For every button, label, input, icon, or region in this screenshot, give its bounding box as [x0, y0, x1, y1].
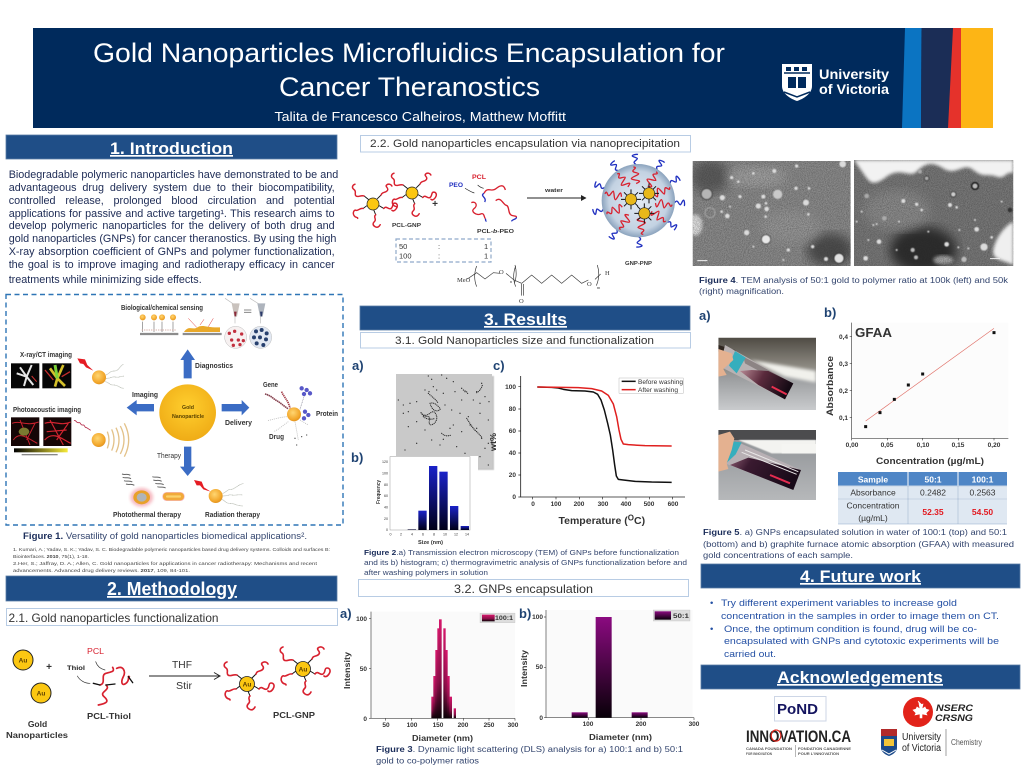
arrow: water: water [544, 188, 564, 194]
scheme: reactants [352, 173, 516, 235]
logo: University of Victoria Chemistry: of Victoria [902, 743, 941, 754]
histogram b: 10 [443, 532, 447, 536]
chemical structure: MeO [457, 277, 471, 284]
gold nanoparticles: Au [19, 658, 27, 664]
future work bullets: concentration in the samples in order to image them on CT. [721, 611, 999, 622]
scheme: gold nanoparticles to PCL-GNP [6, 647, 330, 740]
DLS chart b 50:1: 100 [532, 614, 543, 621]
figure 5 caption: (bottom) and b) graphite furnace atomic absorption (GFAA) with measured [703, 540, 1014, 549]
logo: University of Victoria Chemistry: University [902, 732, 941, 743]
DLS chart a 100:1: 100 [407, 722, 418, 729]
heading: 2. Methodology [6, 576, 337, 601]
DLS chart a 100:1: 50 [360, 666, 367, 673]
PCL-Thiol chains: PCL [87, 647, 105, 656]
gold nanoparticles: Gold [28, 719, 47, 729]
TEM image right [854, 160, 1013, 273]
DLS chart b 50:1: 300 [689, 721, 700, 728]
gold nanoparticles: Au [37, 690, 45, 698]
title banner [33, 28, 993, 128]
figure 3 caption: gold to co-polymer ratios [376, 756, 479, 766]
TGA chart c: C) [634, 515, 645, 527]
ratio box: 1 [484, 242, 488, 251]
arrow: delivery [222, 400, 249, 415]
GFAA labels: 0,10 [917, 442, 930, 449]
chemical structure: n [510, 279, 512, 284]
results table: 50:1 [924, 474, 942, 484]
logo: University of Victoria [782, 64, 889, 101]
DLS chart a 100:1: 100 [356, 616, 367, 623]
brand stripes [902, 28, 993, 128]
delivery illustration [265, 388, 310, 445]
panel: introduction [6, 135, 339, 291]
reaction arrow [149, 660, 220, 692]
subheading 2.2: 2.2. Gold nanoparticles encapsulation via nanoprecipitation [370, 138, 680, 150]
heading: Acknowledgements [701, 665, 1020, 689]
histogram b: 80 [384, 483, 388, 487]
TGA chart c: Before washing [638, 380, 683, 386]
logo: NSERC CRSNG [903, 697, 974, 727]
TGA chart c: 300 [598, 501, 609, 508]
histogram b: 4 [411, 532, 413, 536]
DLS chart b 50:1: b) [519, 606, 531, 621]
logo: NSERC CRSNG: NSERC [936, 703, 973, 714]
panel: figure 4 TEM images [688, 160, 1013, 296]
logo: PoND [774, 696, 826, 721]
figure 1 labels: Gold [182, 405, 194, 411]
results table: 0.2563 [970, 488, 996, 498]
logo: Innovation.ca: FOR INNOVATION [746, 752, 772, 756]
logo: University of Victoria: of Victoria [819, 81, 889, 97]
heading: Acknowledgements: Acknowledgements [777, 668, 943, 687]
arrow: diagnostics [180, 349, 195, 378]
DLS chart a 100:1: 100:1 [495, 615, 513, 622]
DLS chart b 50:1: 100 [583, 721, 594, 728]
references [13, 547, 330, 573]
scheme: reactants: PCL- b-PEO [477, 229, 515, 235]
DLS chart a 100:1: 200 [458, 722, 469, 729]
DLS chart a 100:1: Diameter (nm) [412, 733, 473, 743]
references: 1. Kumari, A.; Yadav, S. K.; Yadav, S. C. Biodegradable polymeric nanoparticles based drug delivery systems. Colloids and surfaces B: [13, 547, 330, 552]
DLS chart a 100:1: 250 [484, 722, 495, 729]
logo: Innovation.ca [746, 727, 852, 757]
figure 1 labels: Therapy [157, 453, 181, 460]
TGA chart c: 200 [574, 501, 585, 508]
PCL-GNP particles: Au [299, 666, 307, 674]
references: Biointerfaces. 2010 , 75(1), 1-18. [13, 554, 89, 559]
logo: University of Victoria: University [819, 66, 889, 82]
arrow: imaging [127, 400, 154, 415]
histogram b: 0 [386, 528, 388, 532]
results table: Absorbance [850, 488, 896, 498]
histogram b: 20 [384, 517, 388, 521]
PCL-Thiol chains: PCL-Thiol [87, 711, 131, 721]
arrow: water [527, 188, 586, 201]
figure 1 labels: Protein [316, 411, 338, 418]
references: 2.Her, S.; Jaffray, D. A.; Allen, C. Gold nanoparticles for applications in cancer radiotherapy: Mechanisms and recent [13, 561, 318, 566]
DLS chart b 50:1: 0 [539, 715, 543, 722]
TGA chart c: 100 [505, 384, 516, 391]
reaction arrow: THF [172, 660, 192, 671]
TGA chart c: After washing [638, 388, 678, 394]
figure 4 caption: (right) magnification. [699, 287, 784, 296]
chemical structure: H [605, 270, 610, 277]
GFAA labels: GFAA [855, 325, 893, 340]
GFAA labels: 0,1 [839, 415, 848, 422]
therapy illustrations [122, 474, 243, 507]
figure 1 labels: Nanoparticle [172, 414, 204, 420]
DLS chart a 100:1: 300 [508, 722, 519, 729]
TGA chart c: 0 [512, 494, 516, 501]
TGA chart c: 600 [668, 501, 679, 508]
figure 5 caption: gold concentrations of each sample. [703, 551, 853, 560]
GFAA labels: 0,00 [846, 442, 859, 449]
gold nanoparticles: Nanoparticles [6, 730, 68, 740]
PCL-Thiol chains: Thiol [67, 665, 85, 672]
subheading 2.1 [6, 608, 338, 626]
ratio box: 1 [484, 252, 488, 260]
figure 5 caption [703, 528, 1014, 560]
gold nanoparticles: + [46, 662, 52, 673]
panel: future work [701, 564, 1020, 660]
logo: NSERC CRSNG: CRSNG [935, 713, 974, 724]
GFAA labels: 0,15 [952, 442, 965, 449]
subheading 2.2 [360, 136, 690, 152]
panel: results [351, 306, 690, 577]
DLS chart b 50:1: 50:1 [673, 613, 689, 620]
future work bullets: Once, the optimum condition is found, drug will be co- [724, 624, 977, 635]
heading: 1. Introduction: 1. Introduction [110, 139, 233, 158]
TEM image left [688, 160, 853, 267]
introduction text: X-ray absorption coefficient of GNPs and polymer functionalization, [9, 246, 335, 258]
panel: figure 5 [699, 305, 1014, 560]
TEM image a [396, 374, 494, 470]
chemical structure [457, 265, 610, 305]
panel letters: a) [352, 358, 364, 373]
figure 4 caption: Figure 4 . TEM analysis of 50:1 gold to polymer ratio at 100k (left) and 50k [699, 276, 1009, 285]
results table: (µg/mL) [858, 513, 888, 523]
figure 1 caption: Figure 1. Versatility of gold nanoparticles biomedical applications². [23, 531, 307, 542]
figure 1 labels: Gene [263, 382, 278, 389]
logo: University of Victoria Chemistry: Chemistry [951, 738, 982, 747]
TGA chart c [488, 376, 685, 527]
TGA chart c: wt% [488, 433, 498, 452]
TGA chart c: Temperature ( [558, 515, 628, 527]
TGA chart c: 40 [509, 450, 516, 457]
panel: methodology [6, 576, 338, 740]
heading: 1. Introduction [6, 135, 337, 159]
chemical structure: O [519, 298, 524, 305]
future work bullets: carried out. [724, 649, 776, 660]
heading: 2. Methodology: 2. Methodology [107, 579, 237, 599]
PCL-GNP particles: PCL-GNP [273, 710, 315, 720]
ratio box: 100 [399, 252, 412, 260]
histogram b: 120 [382, 460, 388, 464]
authors: Talita de Francesco Calheiros, Matthew Moffitt [274, 109, 566, 124]
reaction arrow: Stir [176, 681, 193, 692]
ratio box: 50 [399, 242, 407, 251]
heading: 3. Results [360, 306, 690, 330]
gold ball illustrations [74, 358, 129, 457]
chemical structure: m [597, 285, 601, 290]
histogram b: 6 [422, 532, 424, 536]
ratio box: : [438, 242, 440, 251]
panel letters [699, 305, 836, 323]
results table [838, 472, 1007, 524]
figure 2 caption [364, 548, 687, 577]
histogram b: 0 [390, 532, 392, 536]
figure 1 labels [13, 305, 338, 519]
arrow: therapy [180, 447, 195, 476]
figure 1 labels: Radiation therapy [205, 512, 260, 519]
DLS chart a 100:1: a) [340, 606, 352, 621]
logo: Innovation.ca: POUR L'INNOVATION [798, 752, 839, 756]
figure 1 labels: Photoacoustic imaging [13, 407, 81, 414]
GNP-PNP sphere [593, 154, 685, 267]
logo: University of Victoria Chemistry [881, 729, 982, 756]
photo: 100:1 vial [718, 338, 816, 410]
DLS chart a 100:1: Intensity [342, 652, 352, 689]
results table: Sample [858, 474, 888, 484]
figure 1 labels: X-ray/CT imaging [20, 352, 72, 359]
DLS chart b 50:1: Diameter (nm) [589, 732, 652, 742]
subheading 3.2 [358, 580, 688, 596]
introduction text: applications for passive and active targeting¹. This research aims to [9, 208, 335, 220]
panel: GNPs encapsulation [340, 580, 700, 766]
GFAA plot [850, 323, 1008, 440]
histogram b: 100 [382, 472, 388, 476]
scheme: reactants: PEO [449, 182, 463, 189]
histogram b: 40 [384, 506, 388, 510]
introduction text: gold nanoparticles (GNPs) for cancer theranostics. By using the high [9, 233, 336, 245]
figure 2 caption: after washing polymers in solution [364, 568, 488, 577]
histogram b: 2 [400, 532, 402, 536]
introduction text: Biodegradable polymeric nanoparticles have demonstrated to be and [9, 169, 338, 181]
figure 1 labels: Biological/chemical sensing [121, 305, 203, 312]
TGA chart c: 80 [509, 406, 516, 413]
histogram b: 14 [465, 532, 469, 536]
future work bullets [710, 598, 999, 660]
ratio box [396, 239, 491, 262]
heading: 3. Results: 3. Results [484, 310, 567, 329]
subheading 3.1 [360, 332, 690, 348]
DLS chart a 100:1: 50 [382, 722, 390, 729]
introduction text: develop polymeric nanoparticles for the delivery of both drug and [9, 220, 335, 232]
figure 1 labels: Photothermal therapy [113, 512, 181, 519]
logo: Innovation.ca: FONDATION CANADIENNE [798, 747, 852, 751]
histogram b [373, 456, 478, 550]
logo: Innovation.ca: CANADA FOUNDATION [746, 747, 792, 751]
DLS chart a 100:1: 0 [363, 716, 367, 723]
TGA chart c: 400 [621, 501, 632, 508]
DLS chart b 50:1 [519, 606, 700, 742]
chemical structure: O [587, 281, 592, 288]
subheading 3.2: 3.2. GNPs encapsulation [454, 582, 593, 596]
figure 2 caption: and its b) histogram; c) thermogravimetric analysis of GNPs functionalization before and [364, 558, 687, 567]
future work bullets: • [710, 598, 713, 609]
DLS chart a 100:1 [340, 606, 519, 743]
PCL-GNP particles: Au [243, 682, 251, 688]
histogram b: Frequency [376, 479, 382, 504]
GFAA labels: 0,20 [988, 442, 1001, 449]
PCL-Thiol chains [67, 647, 133, 721]
figure 1 labels: Diagnostics [195, 363, 233, 370]
panel: encapsulation via nanoprecipitation [352, 136, 690, 305]
photo: 50:1 vial [718, 430, 816, 500]
gold nanoparticles [6, 650, 68, 740]
chemical structure: O [499, 269, 504, 276]
introduction text [9, 169, 339, 291]
TGA chart c: 20 [509, 472, 516, 479]
GFAA labels: Absorbance [825, 356, 836, 416]
figure 3 caption [376, 745, 684, 766]
figure 2 caption: Figure 2 .a) Transmission electron microscopy (TEM) of GNPs before functionalization [364, 548, 679, 557]
results table: Concentration [847, 500, 900, 510]
heading: 4. Future work: 4. Future work [800, 567, 922, 586]
TGA chart c: 500 [644, 501, 655, 508]
results table: 52.35 [922, 507, 944, 517]
GNP-PNP sphere: GNP-PNP [625, 261, 652, 267]
figure 1 labels: Imaging [132, 392, 158, 399]
x-ray CT images [11, 363, 71, 388]
GFAA labels: 0,05 [881, 442, 894, 449]
histogram b: 60 [384, 494, 388, 498]
scheme: reactants: PCL [472, 174, 486, 181]
DLS chart b 50:1: Intensity [519, 650, 529, 687]
title: Gold Nanoparticles Microfluidics Encapsulation for [93, 38, 725, 68]
results table: 0.2482 [920, 488, 946, 498]
GFAA labels: 0,3 [839, 361, 848, 368]
introduction text: the goal is to improve imaging and radiotherapy efficacy in cancer [9, 259, 335, 271]
histogram b: Size (nm) [418, 540, 443, 546]
panel letters: b) [351, 450, 363, 465]
subheading 2.1: 2.1. Gold nanoparticles functionalization [8, 611, 218, 625]
gold nanoparticle centre [159, 384, 216, 441]
scheme: reactants: + [432, 199, 438, 210]
sensing illustrations [140, 298, 272, 348]
panel letters [351, 358, 505, 465]
title: Cancer Theranostics [279, 72, 540, 102]
GFAA labels: Concentration (µg/mL) [876, 456, 984, 467]
figure 4 caption [699, 276, 1009, 296]
TGA chart c: O [628, 514, 634, 522]
GFAA labels: 0,4 [839, 334, 848, 341]
panel: acknowledgements [701, 665, 1020, 757]
subheading 3.1: 3.1. Gold Nanoparticles size and functionalization [395, 335, 654, 347]
photoacoustic images [11, 417, 71, 455]
PCL-GNP particles [224, 647, 330, 720]
logo: PoND: PoND [777, 701, 818, 718]
figure 5 caption: Figure 5 . a) GNPs encapsulated solution in water of 100:1 (top) and 50:1 [703, 528, 1008, 537]
references: advancements. Advanced drug delivery reviews. 2017 , 109, 84-101. [13, 568, 190, 573]
DLS chart a 100:1: 150 [433, 722, 444, 729]
GFAA labels: 0,2 [839, 388, 848, 395]
scheme: reactants: PCL-GNP [392, 223, 421, 229]
title [93, 38, 725, 102]
TGA chart c: 60 [509, 428, 516, 435]
panel letters: a) [699, 308, 711, 323]
DLS chart b 50:1: 200 [636, 721, 647, 728]
ratio box: : [438, 252, 440, 260]
panel letters: b) [824, 305, 836, 320]
results table: 100:1 [972, 474, 994, 484]
figure 1 labels: Drug [269, 434, 284, 441]
future work bullets: encapsulated with GNPs and cytotoxic experiments will be [724, 636, 999, 647]
figure 3 caption: Figure 3 . Dynamic light scattering (DLS) analysis for a) 100:1 and b) 50:1 [376, 745, 684, 754]
TGA chart c: 0 [531, 501, 535, 508]
heading: 4. Future work [701, 564, 1020, 588]
panel: figure 1 versatility diagram [6, 294, 343, 525]
DLS chart b 50:1: 50 [536, 664, 543, 671]
introduction text: advantageous drug delivery system due to their biocompatibility, [9, 182, 335, 194]
histogram b: 12 [454, 532, 458, 536]
logo: Innovation.ca: INNOVATION.CA [746, 727, 851, 746]
future work bullets: • [710, 624, 713, 635]
histogram b: 8 [433, 532, 435, 536]
future work bullets: Try different experiment variables to increase gold [721, 598, 957, 609]
panel letters: c) [493, 358, 505, 373]
GFAA labels [825, 325, 1001, 467]
introduction text: controlled release, prolonged blood circulation and potential [9, 195, 335, 207]
TGA chart c: 100 [551, 501, 562, 508]
introduction text: treatments while minimizing side effects. [9, 274, 202, 286]
results table: 54.50 [972, 507, 993, 517]
figure 1 labels: Delivery [225, 420, 252, 427]
